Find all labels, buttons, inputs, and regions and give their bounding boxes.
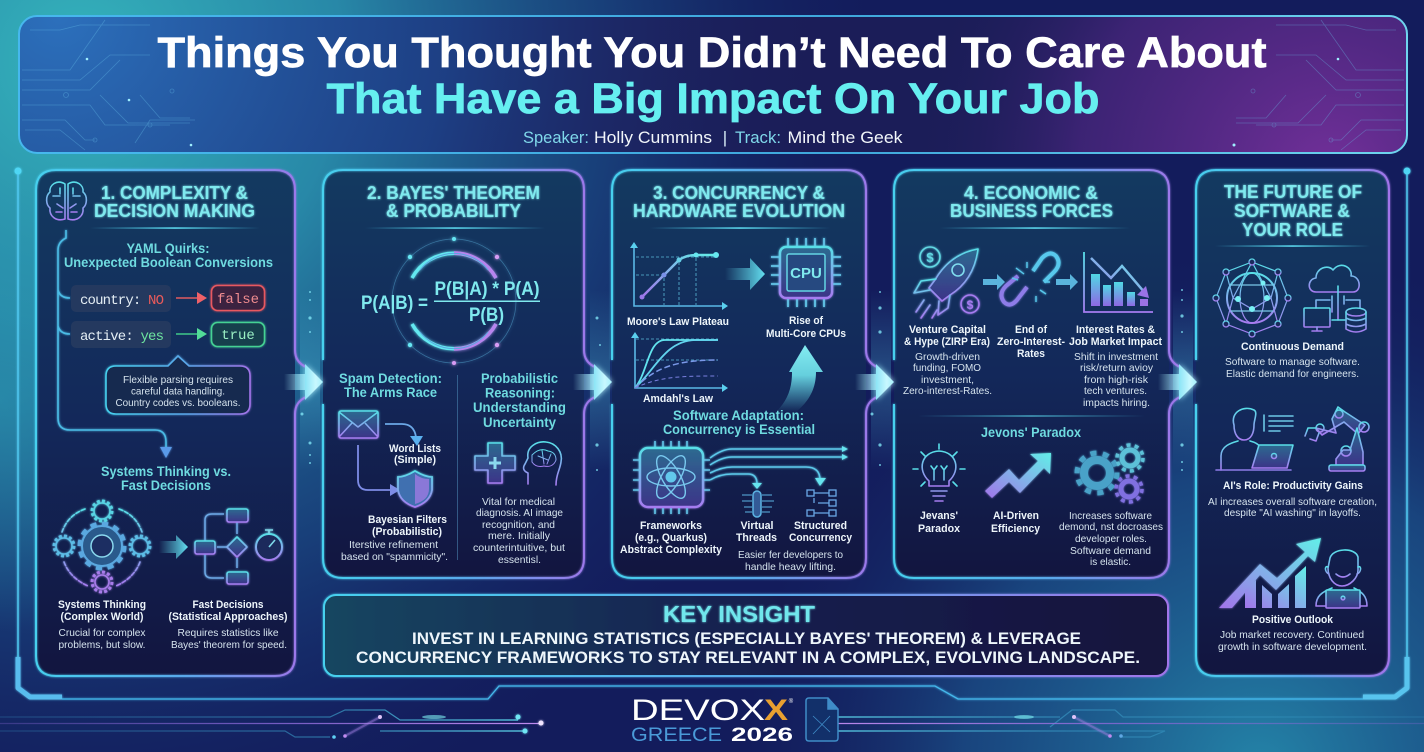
icon: rocket (914, 247, 979, 318)
chart: amdahl's law (631, 332, 728, 392)
logo: devoxx greece 2026: DEVOX (631, 694, 765, 727)
formula (361, 278, 540, 326)
code row: country: country: NO (80, 293, 164, 309)
formula: P(B) (469, 304, 504, 326)
heading: THE FUTURE OF (1224, 182, 1362, 202)
icon: shield (398, 471, 432, 507)
text: continuous demand (1225, 341, 1360, 380)
text: fast decisions: Fast Decisions (192, 599, 264, 611)
text: end of zero interest rates (997, 324, 1065, 360)
icon: gears (1077, 445, 1143, 502)
header banner (19, 16, 1407, 153)
title: Things You Thought You Didn’t Need To Care About (158, 29, 1266, 77)
logo: devoxx greece 2026: ® (789, 698, 794, 705)
text: easier for developers: handle heavy lifting. (745, 561, 836, 573)
text: interest rates: Interest Rates & (1076, 324, 1155, 336)
code row: country (71, 285, 264, 312)
heading: 4. ECONOMIC & (964, 183, 1098, 203)
text: amdahl's law: Amdahl's Law (643, 393, 713, 405)
icon: framework atom chip (633, 441, 710, 514)
icon: falling bars chart (1084, 252, 1153, 312)
icon: envelope (339, 411, 378, 438)
text: ai's role: despite "AI washing" in layoffs. (1224, 507, 1361, 519)
heading: BUSINESS FORCES (950, 201, 1113, 221)
arrow (725, 258, 765, 290)
text: interest rates: Job Market Impact (1069, 336, 1162, 348)
text: increases software demand: Software demand (1070, 545, 1151, 557)
text: interest rates: impacts hiring. (1083, 397, 1150, 409)
speaker line: Holly Cummins (594, 128, 712, 147)
icon: document (806, 698, 838, 741)
heading (950, 183, 1113, 221)
icon: rocket: $ (926, 250, 934, 265)
text: interest rates: Shift in investment (1074, 351, 1158, 363)
text: end of zero interest rates: Rates (1017, 348, 1045, 360)
key insight panel: KEY INSIGHT (663, 601, 815, 627)
text: venture capital: Zero-interest-Rates. (903, 385, 992, 397)
text: structured concurrency (789, 520, 853, 544)
icon: cloud and devices (1304, 265, 1366, 332)
icon: medical cross (475, 443, 515, 483)
icon: cpu chip (771, 238, 841, 307)
text: venture capital: funding, FOMO (913, 362, 981, 374)
panel 5: future of software (1196, 170, 1389, 676)
text: medical (473, 496, 565, 566)
text: interest rates: tech ventures. (1084, 385, 1147, 397)
text: ai-driven efficiency: AI-Driven (993, 510, 1039, 522)
text: increases software demand: developer roles. (1075, 533, 1147, 545)
text: frameworks (620, 520, 723, 556)
icon: cpu chip: CPU (790, 265, 822, 282)
logo: devoxx greece 2026: 2026 (731, 725, 793, 746)
text: systems thinking: (Complex World) (60, 611, 144, 623)
logo: devoxx greece 2026 (631, 694, 794, 746)
text: positive outlook: Job market recovery. Continued (1220, 629, 1364, 641)
text: venture capital: Venture Capital (909, 324, 986, 336)
text: fast decisions: (Statistical Approaches) (168, 611, 288, 623)
text: ai-driven efficiency: Efficiency (991, 523, 1041, 535)
text: systems thinking (58, 599, 146, 651)
heading: SOFTWARE & (1234, 201, 1350, 221)
spam arrows (358, 424, 423, 496)
text: frameworks: Frameworks (640, 520, 702, 532)
text: continuous demand: Elastic demand for engineers. (1226, 368, 1359, 380)
icon: growth chart (1219, 538, 1321, 608)
text: word lists: Word Lists (389, 443, 441, 455)
text: bayesian filters: (Probabilistic) (372, 526, 442, 538)
text: easier for developers (738, 549, 843, 573)
code row: country: false (217, 292, 259, 308)
text: frameworks: Abstract Complexity (620, 544, 723, 556)
text: ai-driven efficiency (991, 510, 1041, 535)
heading: DECISION MAKING (94, 201, 255, 221)
heading (367, 183, 540, 221)
text: ai's role: AI increases overall software creation, (1208, 496, 1377, 508)
reasoning heading: Probabilistic (481, 371, 558, 386)
text: venture capital: investment, (921, 374, 974, 386)
formula: P(B|A) * P(A) (434, 278, 540, 300)
icon: head with brain (524, 442, 561, 485)
text: continuous demand: Continuous Demand (1241, 341, 1344, 353)
text: word lists: (Simple) (394, 454, 436, 466)
text: rise of multi-core cpus: Multi-Core CPUs (766, 328, 846, 340)
arrow: panel 1 to 2 (284, 364, 323, 400)
text: structured concurrency: Concurrency (789, 532, 853, 544)
text: medical: counterintuitive, but (473, 542, 565, 554)
code row: active: active: yes (80, 329, 164, 345)
arrow (159, 535, 188, 559)
yaml quirks heading: YAML Quirks: (126, 241, 210, 256)
text: bayesian filters: Iterstive refinement (349, 539, 438, 551)
chart: moore's law (630, 242, 728, 310)
text: increases software demand: is elastic. (1090, 556, 1131, 568)
text: interest rates (1069, 324, 1162, 409)
text: medical: essentisl. (498, 554, 541, 566)
text: increases software demand (1059, 510, 1163, 568)
panel 2: bayes theorem (323, 170, 595, 578)
icon: rocket: $ (967, 298, 974, 312)
flow arrows (710, 446, 848, 489)
icon: broken chain (1001, 253, 1059, 305)
icon: systems gears (54, 501, 150, 592)
key insight panel (324, 595, 1168, 676)
text: medical: recognition, and (482, 519, 555, 531)
heading (633, 183, 845, 221)
reasoning heading: Uncertainty (483, 415, 556, 430)
arrow: panel 4 to 5 (1158, 364, 1197, 400)
text: end of zero interest rates: End of (1015, 324, 1047, 336)
title (158, 29, 1266, 123)
icon: virtual threads (742, 491, 774, 517)
callout: flexible parsing: Country codes vs. booleans. (116, 397, 240, 409)
text: frameworks: (e.g., Quarkus) (635, 532, 707, 544)
logo: devoxx greece 2026: X (764, 694, 788, 727)
speaker line (523, 128, 903, 147)
callout: flexible parsing: careful data handling. (131, 386, 225, 398)
text: interest rates: from high-risk (1084, 374, 1149, 386)
text: bayesian filters (341, 514, 448, 563)
text: venture capital: & Hype (ZIRP Era) (904, 336, 990, 348)
title: That Have a Big Impact On Your Job (326, 75, 1100, 123)
panel 4: economic and business forces (894, 170, 1180, 578)
speaker line: Track: (735, 128, 781, 147)
gutter dots (300, 289, 1184, 471)
text: medical: diagnosis. AI image (476, 507, 563, 519)
text: end of zero interest rates: Zero-Interest- (997, 336, 1065, 348)
speaker line: Mind the Geek (788, 128, 903, 147)
text: moore's law plateau: Moore's Law Plateau (627, 316, 729, 328)
speaker line: | (723, 128, 727, 147)
spam detection heading: The Arms Race (344, 385, 437, 400)
text: bayesian filters: based on "spammicity". (341, 551, 448, 563)
callout: flexible parsing: Flexible parsing requires (123, 374, 233, 386)
heading: HARDWARE EVOLUTION (633, 201, 845, 221)
text: easier for developers: Easier fer developers to (738, 549, 843, 561)
text: jevons: Paradox (918, 523, 961, 535)
text: medical: Vital for medical (482, 496, 555, 508)
reasoning heading: Reasoning: (485, 386, 555, 400)
text: increases software demand: Increases software (1069, 510, 1152, 522)
formula: P(A|B) = (361, 292, 428, 314)
heading: & PROBABILITY (386, 201, 521, 221)
heading (94, 183, 255, 221)
heading: YOUR ROLE (1242, 220, 1343, 240)
text: positive outlook: Positive Outlook (1252, 614, 1334, 626)
panel 3: concurrency and hardware (612, 170, 877, 578)
spam detection heading: Spam Detection: (339, 371, 442, 386)
heading: 1. COMPLEXITY & (101, 183, 248, 203)
yaml quirks heading (64, 241, 273, 270)
text: fast decisions (168, 599, 288, 651)
icon: globe network (1213, 259, 1291, 337)
subheading: systems thinking: Fast Decisions (121, 478, 211, 493)
icon: person at laptop (1216, 408, 1293, 470)
arrow: panel 2 to 3 (573, 364, 612, 400)
text: systems thinking: problems, but slow. (58, 639, 146, 651)
text: positive outlook (1218, 614, 1367, 653)
text: ai's role: AI's Role: Productivity Gains (1223, 480, 1363, 492)
icon: structured concurrency (807, 490, 836, 516)
text: medical: mere. Initially (488, 530, 551, 542)
icon: brain (47, 182, 86, 220)
subheading: jevons paradox: Jevons' Paradox (981, 425, 1081, 440)
text: venture capital (903, 324, 992, 397)
heading: 3. CONCURRENCY & (653, 183, 825, 203)
text: continuous demand: Software to manage software. (1225, 356, 1360, 368)
circuit frame lines (0, 168, 1424, 739)
subheading: software adaptation: Software Adaptation: (673, 408, 804, 423)
icon: upward trend arrow (985, 453, 1051, 498)
code row: active (71, 321, 264, 348)
text: systems thinking: Crucial for complex (58, 627, 146, 639)
yaml quirks heading: Unexpected Boolean Conversions (64, 255, 273, 270)
subheading: systems thinking (101, 464, 231, 493)
text: ai's role (1208, 480, 1377, 519)
code row: active: true (221, 328, 255, 344)
heading (1224, 182, 1362, 240)
key insight panel: CONCURRENCY FRAMEWORKS TO STAY RELEVANT IN A COMPLEX, EVOLVING LANDSCAPE. (356, 649, 1140, 667)
text: positive outlook: growth in software development. (1218, 641, 1367, 653)
arrow: up to cpu (776, 345, 823, 412)
text: rise of multi-core cpus: Rise of (789, 315, 823, 327)
text: jevons: Jevans' (920, 510, 958, 522)
formula ring (392, 237, 516, 365)
heading: 2. BAYES' THEOREM (367, 183, 540, 203)
text: interest rates: risk/return avioy (1080, 362, 1154, 374)
text: systems thinking: Systems Thinking (58, 599, 146, 611)
text: jevons (918, 510, 961, 535)
text: structured concurrency: Structured (794, 520, 847, 532)
connector line (58, 230, 172, 458)
icon: robot arm (1305, 407, 1369, 471)
speaker line: Speaker: (523, 128, 589, 147)
text: virtual threads (736, 520, 777, 544)
text: bayesian filters: Bayesian Filters (368, 514, 447, 526)
reasoning heading (473, 371, 566, 430)
icon: person with laptop (1316, 550, 1367, 608)
subheading: software adaptation: Concurrency is Essential (663, 422, 815, 437)
spam detection heading (339, 371, 442, 400)
text: increases software demand: demond, nst docroases (1059, 521, 1163, 533)
text: fast decisions: Requires statistics like (178, 627, 279, 639)
callout: flexible parsing (106, 356, 250, 414)
text: fast decisions: Bayes' theorem for speed. (171, 639, 287, 651)
subheading: systems thinking: Systems Thinking vs. (101, 464, 231, 479)
arrow: panel 3 to 4 (855, 364, 894, 400)
reasoning heading: Understanding (473, 400, 566, 415)
key insight panel: INVEST IN LEARNING STATISTICS (ESPECIALLY BAYES' THEOREM) & LEVERAGE (412, 630, 1081, 648)
text: venture capital: Growth-driven (915, 351, 980, 363)
arrow (1056, 274, 1078, 290)
text: virtual threads: Threads (736, 532, 777, 544)
text: word lists (389, 443, 441, 466)
panel 1: complexity and decision making (36, 170, 306, 676)
icon: light bulb (913, 444, 965, 501)
subheading: software adaptation (663, 408, 815, 437)
text: rise of multi-core cpus (766, 315, 846, 340)
logo: devoxx greece 2026: GREECE (631, 725, 722, 746)
text: virtual threads: Virtual (740, 520, 774, 532)
arrow (983, 274, 1005, 290)
icon: flowchart and stopwatch (195, 509, 282, 584)
